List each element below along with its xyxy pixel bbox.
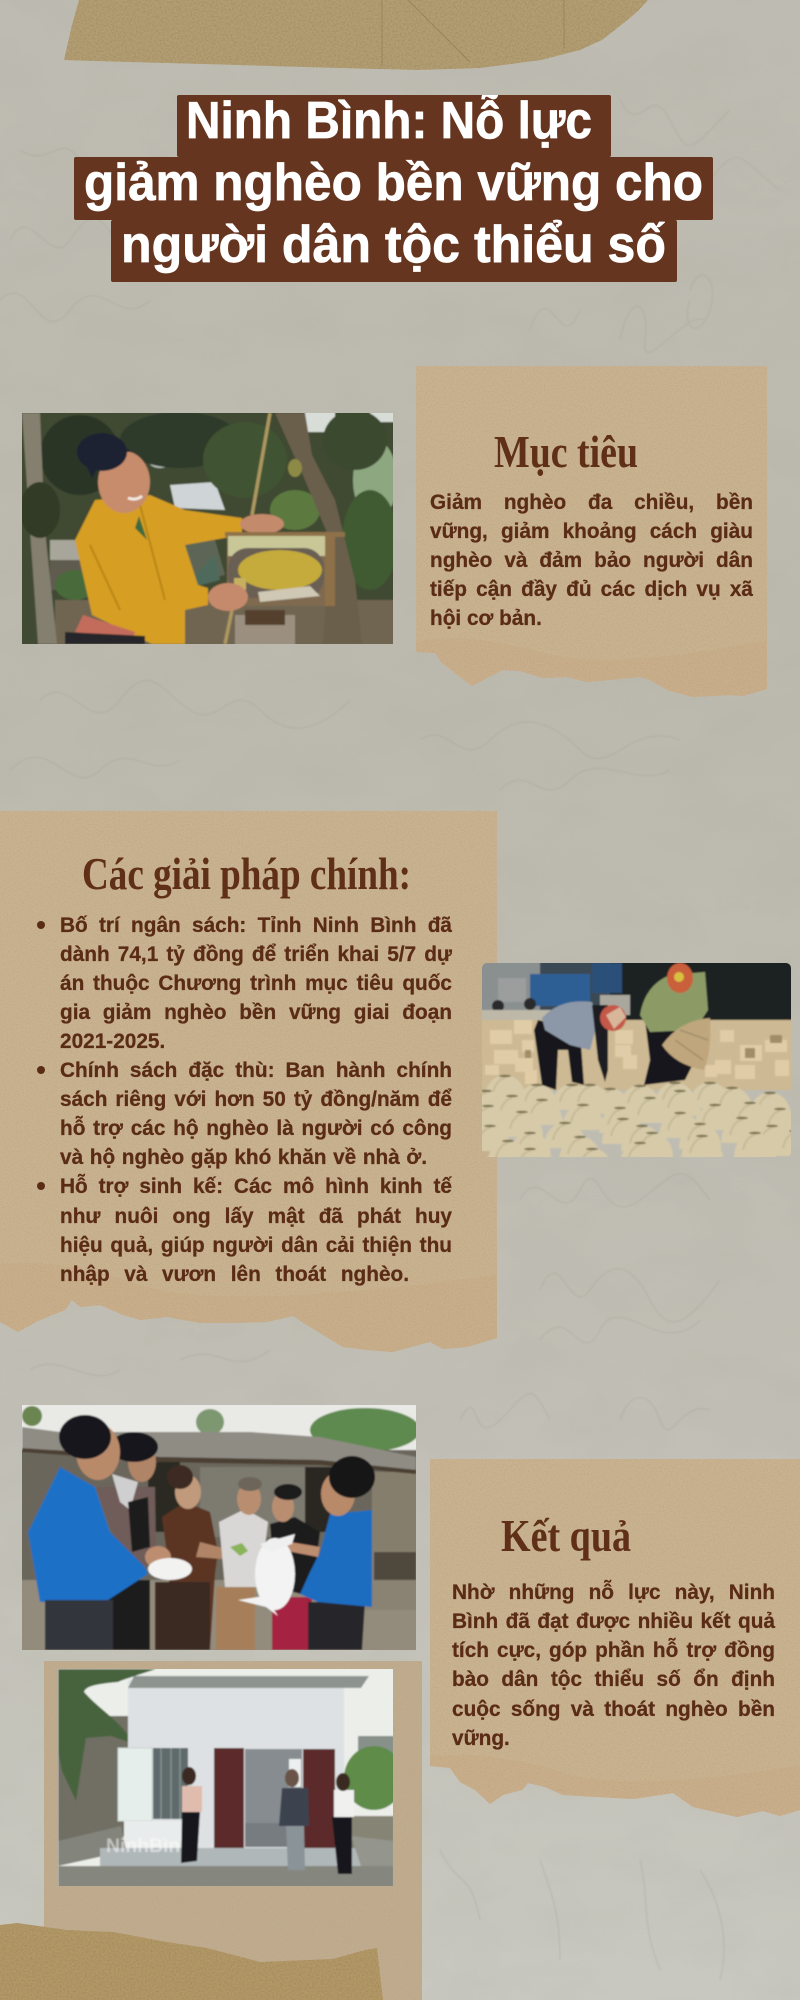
text block: objective: nghèo và đảm bảo người dân — [430, 549, 753, 572]
bullet: special policy: hỗ trợ các hộ nghèo là người có công — [60, 1117, 452, 1140]
text block: results: cuộc sống và thoát nghèo bền — [452, 1698, 775, 1721]
text block: objective: tiếp cận đầy đủ các dịch vụ xã — [430, 578, 753, 601]
photo: new house with three women — [58, 1669, 393, 1886]
bullet: budget: Bố trí ngân sách: Tỉnh Ninh Bình đã — [60, 914, 452, 937]
bullet: budget: gia giảm nghèo bền vững giai đoạn — [60, 1001, 452, 1024]
text block: results: Bình đã đạt được nhiều kết quả — [452, 1610, 775, 1633]
bullet: special policy — [37, 1059, 452, 1169]
text block: objective: vững, giảm khoảng cách giàu — [430, 520, 753, 543]
bullet: budget: 2021-2025. — [60, 1030, 165, 1053]
bullet: special policy: và hộ nghèo gặp khó khăn về nhà ở. — [60, 1146, 427, 1169]
bullet: livelihood — [37, 1174, 452, 1286]
title: người dân tộc thiểu số — [121, 216, 666, 274]
text block: results: vững. — [452, 1727, 510, 1750]
panel: Kết quả — [430, 1459, 800, 1817]
text block: objective: Giảm nghèo đa chiều, bền — [430, 491, 753, 514]
bullet: livelihood: nhập và vươn lên thoát nghèo. — [60, 1263, 409, 1286]
panel: backing sheet for house photo — [44, 1661, 422, 2000]
panel: Các giải pháp chính — [0, 811, 497, 1352]
bullet: livelihood: như nuôi ong lấy mật đã phát huy — [60, 1205, 452, 1228]
bullet: budget: dành 74,1 tỷ đồng để triển khai 5/7 dự — [60, 943, 452, 966]
text block: results — [452, 1580, 776, 1750]
title — [74, 95, 713, 282]
torn kraft paper at bottom left — [0, 1923, 383, 2000]
text block: results: tích cực, góp phần hỗ trợ đồng — [452, 1639, 775, 1662]
bullet: budget — [37, 914, 452, 1053]
bullet: livelihood: hiệu quả, giúp người dân cải thiện thu — [60, 1234, 452, 1257]
bullet: budget: án thuộc Chương trình mục tiêu quốc — [60, 972, 452, 995]
text block: objective — [430, 491, 754, 630]
text block: objective: hội cơ bản. — [430, 607, 542, 630]
bullet: special policy: sách riêng với hơn 50 tỷ đồng/năm để — [60, 1088, 452, 1111]
photo: woman holding a honeycomb frame — [22, 413, 393, 644]
photo: new house with three women: NinhBình — [106, 1836, 192, 1857]
text block: results: bào dân tộc thiểu số ổn định — [452, 1668, 775, 1691]
panel: Mục tiêu — [416, 366, 767, 697]
bullet list: solutions — [37, 914, 452, 1286]
bullet: special policy: Chính sách đặc thù: Ban hành chính — [60, 1059, 452, 1082]
photo: workers with bamboo baskets — [482, 963, 791, 1157]
torn kraft paper at top — [64, 0, 648, 70]
text block: results: Nhờ những nỗ lực này, Ninh — [452, 1581, 775, 1604]
photo: handing over rabbits — [22, 1405, 416, 1650]
bullet: livelihood: Hỗ trợ sinh kế: Các mô hình kinh tế — [60, 1175, 452, 1198]
